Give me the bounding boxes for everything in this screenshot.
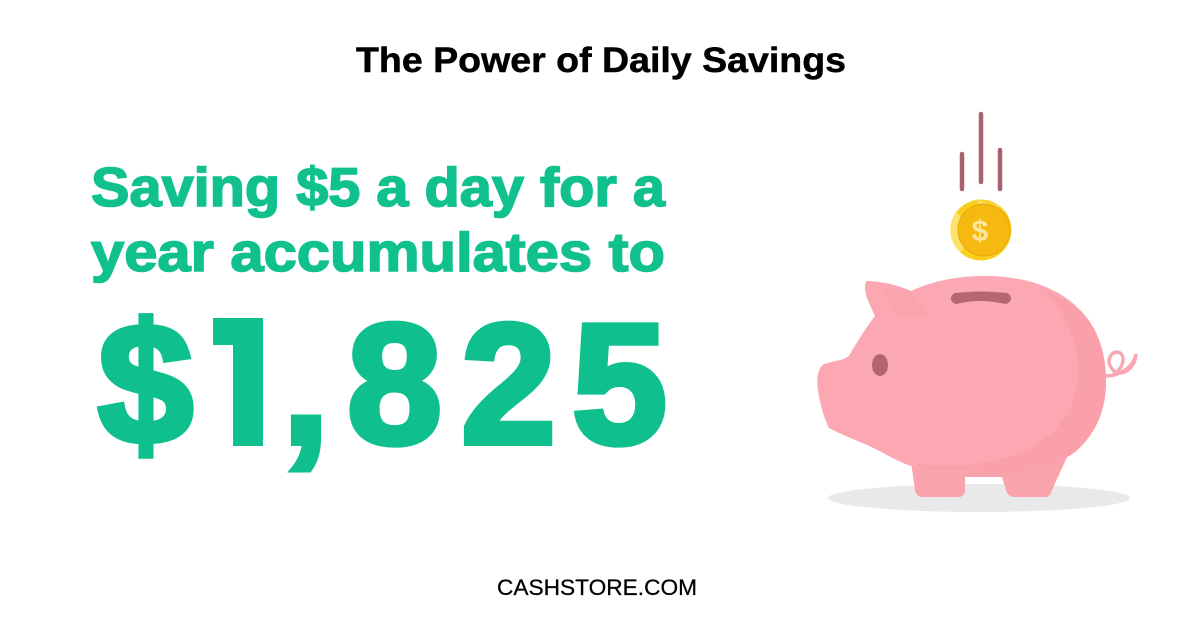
- pig eye: [872, 354, 888, 376]
- pig body shading: [915, 289, 1106, 471]
- ground shadow: [828, 484, 1130, 512]
- headline text: [91, 156, 665, 283]
- pig ear: [880, 287, 929, 315]
- falling motion lines: [962, 114, 1000, 189]
- big number: $1,825: [98, 289, 667, 480]
- footer brand: CASHSTORE.COM: [497, 575, 697, 600]
- pig legs: [910, 455, 1068, 497]
- pig body: [817, 276, 1106, 469]
- coin slot: [951, 292, 1011, 304]
- gold coin: $: [972, 215, 989, 248]
- headline text: Saving $5 a day for a: [91, 156, 665, 218]
- headline text: year accumulates to: [91, 221, 665, 283]
- pig tail: [1105, 352, 1136, 376]
- gold coin: [950, 200, 1012, 260]
- icon: piggy bank with falling coin: [817, 114, 1136, 512]
- title: The Power of Daily Savings: [356, 41, 846, 80]
